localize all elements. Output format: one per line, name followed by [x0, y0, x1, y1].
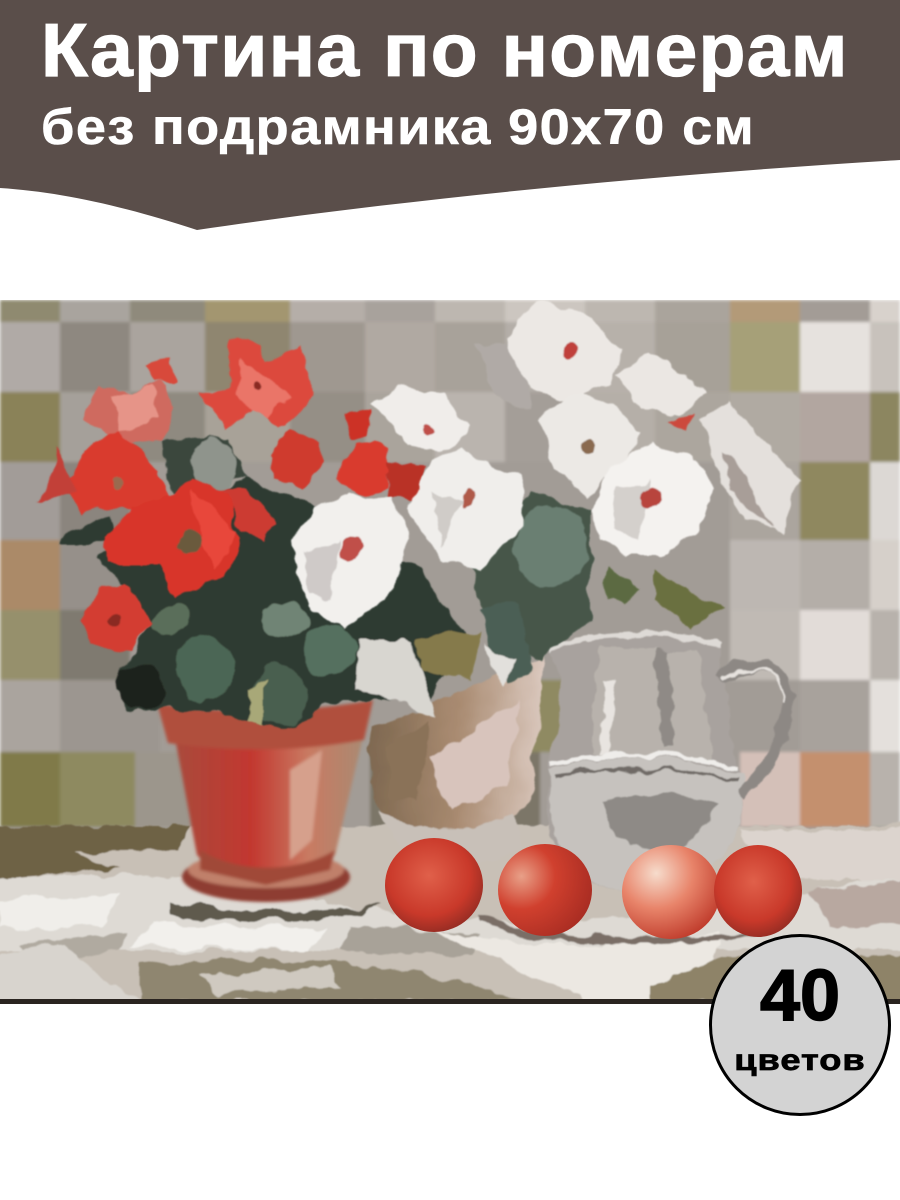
badge number: 40 — [760, 956, 840, 1036]
badge: 40 colours — [709, 934, 891, 1116]
title: Картина по номерам — [41, 8, 849, 92]
foliage — [60, 435, 725, 730]
glass jug — [548, 635, 788, 893]
white flowers — [291, 302, 800, 628]
peach 3 — [622, 845, 720, 939]
header banner — [0, 0, 900, 230]
red pot — [157, 700, 373, 902]
peach 4 — [714, 845, 802, 937]
red flowers — [33, 340, 425, 650]
table with white cloth — [0, 826, 900, 1004]
subtitle: без подрамника 90х70 см — [41, 99, 755, 155]
badge label: цветов — [734, 1044, 866, 1077]
back pot — [368, 655, 545, 865]
peach 1 — [385, 838, 483, 932]
painting: still life with flowers, jug and peaches — [0, 300, 900, 1004]
peach 2 — [498, 844, 592, 936]
peaches — [385, 838, 802, 939]
tiled wall background — [0, 300, 900, 840]
table edge — [0, 999, 900, 1004]
